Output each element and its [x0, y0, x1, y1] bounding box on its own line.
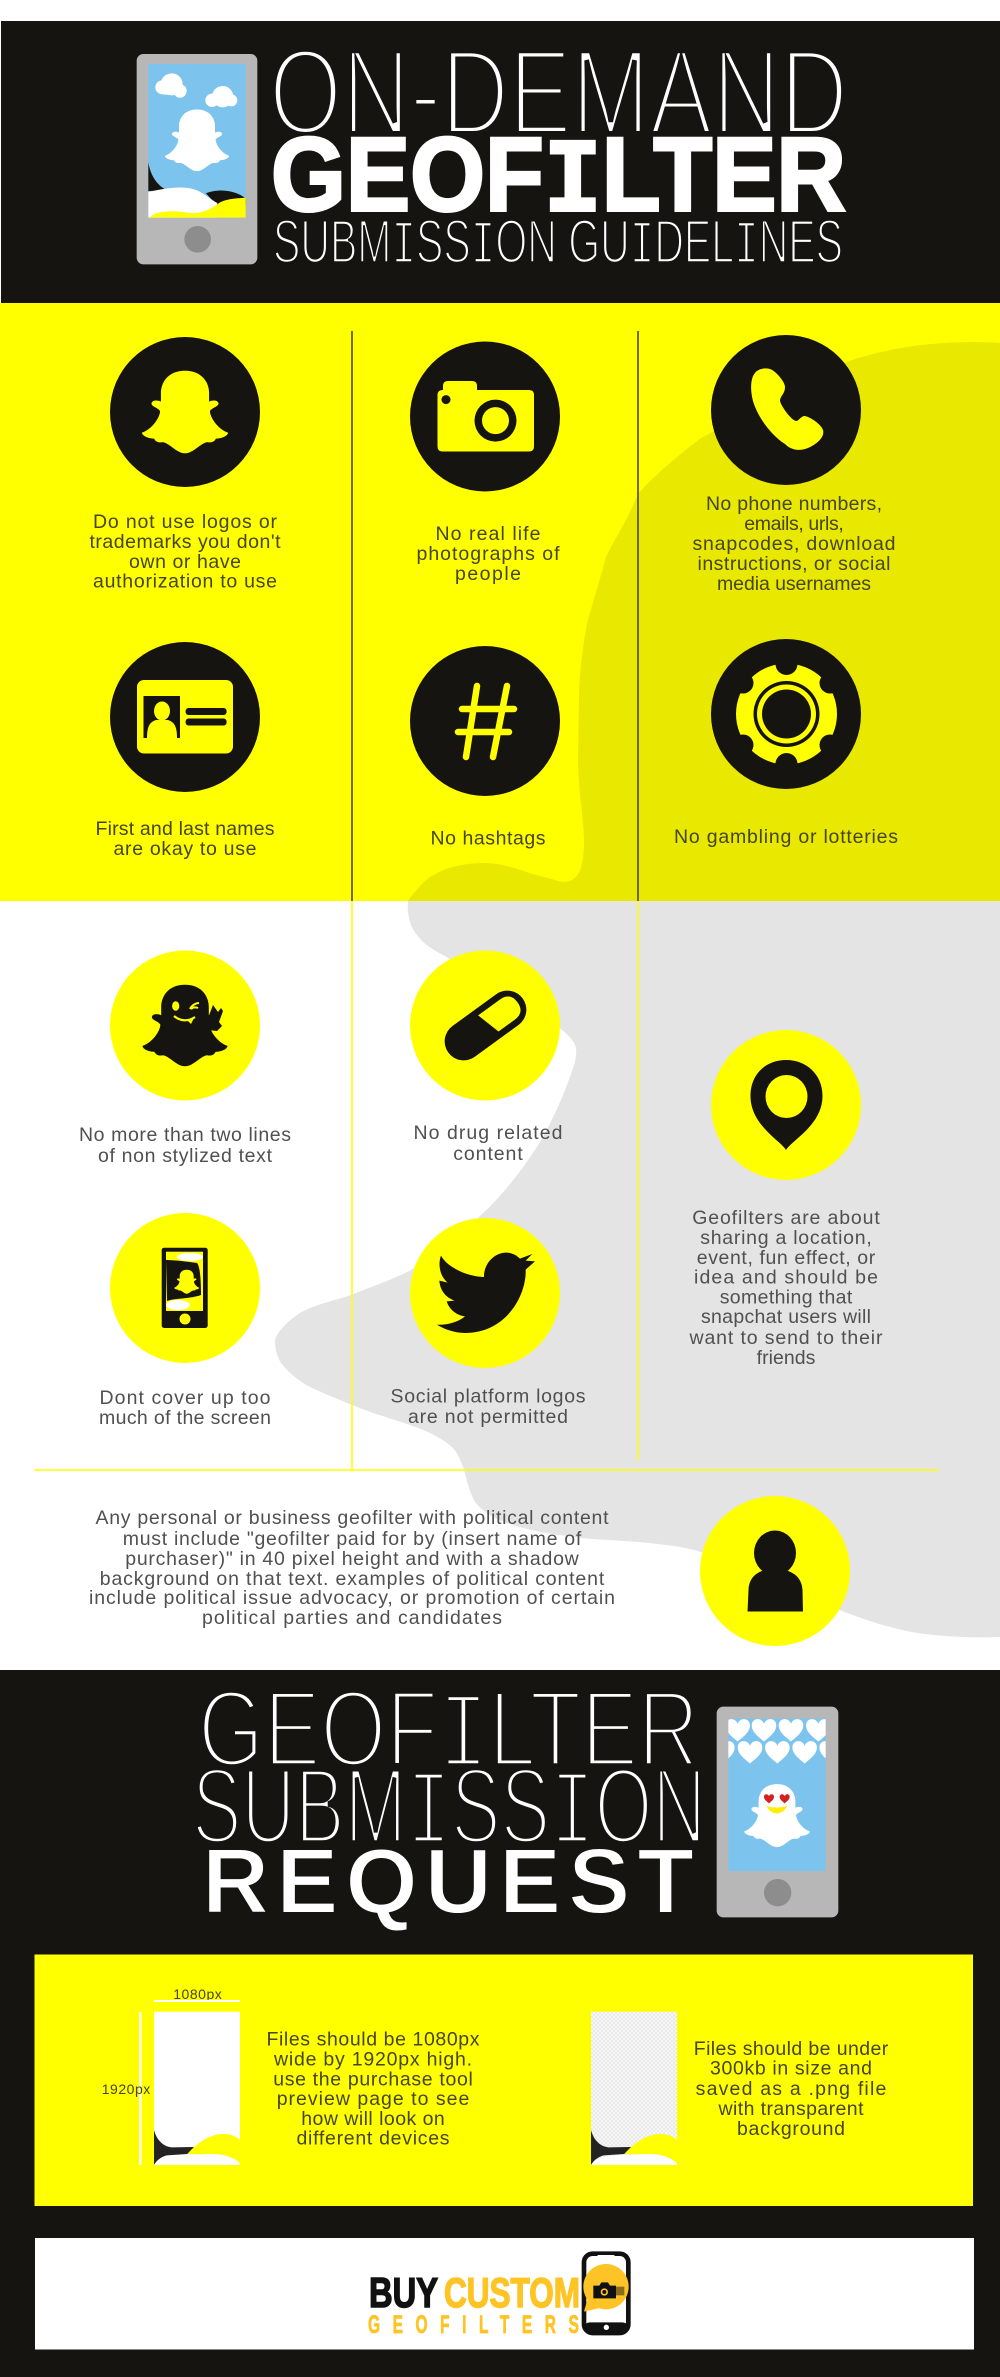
item: political content: background on that text. examples of political content — [100, 1568, 605, 1590]
text: file dimensions: different devices — [296, 2128, 450, 2150]
item: no more than two lines of text: No more than two lines — [79, 1124, 291, 1146]
text: file dimensions: use the purchase tool — [273, 2069, 473, 2091]
header band — [1, 21, 1000, 303]
item: first and last names okay: First and last names — [96, 818, 275, 840]
item: social platform logos: Social platform logos — [390, 1386, 586, 1408]
item: no more than two lines of text — [79, 950, 291, 1167]
item: no more than two lines of text: of non stylized text — [98, 1145, 273, 1167]
background blob — [275, 342, 1000, 1638]
item: no phone numbers: instructions, or social — [698, 553, 890, 575]
item: dont cover up the screen: Dont cover up too — [100, 1387, 271, 1409]
item: no drug related content — [410, 950, 562, 1165]
title: geofilter submission request: SUBMISSION — [192, 1746, 706, 1876]
logo: buy custom geofilters: GEOFILTERS — [368, 2311, 579, 2339]
icon: phone with heart-eye ghost — [710, 1707, 844, 1917]
item: dont cover up the screen: much of the screen — [99, 1407, 271, 1429]
item: no logos or trademarks: Do not use logos or — [93, 511, 278, 533]
item: dont cover up the screen — [99, 1213, 271, 1429]
item: no real life photographs: No real life — [436, 523, 540, 545]
panel: file requirements — [34, 1954, 973, 2206]
panel: logo strip — [35, 2238, 974, 2350]
logo: buy custom geofilters: CUSTOM — [444, 2269, 580, 2316]
text: file dimensions: how will look on — [301, 2108, 445, 2130]
item: no gambling or lotteries: No gambling or lotteries — [674, 826, 898, 848]
item: social platform logos: are not permitted — [408, 1406, 568, 1428]
item: no phone numbers: No phone numbers, — [706, 493, 882, 515]
text: file dimensions: preview page to see — [277, 2088, 469, 2110]
text: file dimensions — [266, 2028, 480, 2150]
item: no phone numbers — [692, 335, 896, 595]
item: first and last names okay — [96, 642, 275, 860]
item: no logos or trademarks: own or have — [129, 551, 241, 573]
text: file size and format: background — [737, 2118, 845, 2140]
text: file size and format: saved as a .png file — [696, 2078, 886, 2100]
text: file size and format: with transparent — [718, 2098, 864, 2120]
text: file size and format — [694, 2038, 889, 2140]
item: geofilters are about sharing: idea and should be — [694, 1267, 878, 1289]
item: no drug related content: No drug related — [414, 1122, 562, 1144]
lower black section — [0, 1670, 1000, 2377]
item: political content: purchaser)" in 40 pixel height and with a shadow — [125, 1548, 580, 1570]
title: on-demand geofilter submission guidelines: SUBMISSION GUIDELINES — [273, 208, 843, 282]
dimension: 1920px height: 1920px — [102, 2081, 150, 2097]
item: political content: must include "geofilter paid for by (insert name of — [123, 1528, 582, 1550]
title: geofilter submission request: GEOFILTER — [198, 1668, 699, 1799]
item: no phone numbers: emails, urls, — [744, 513, 844, 535]
item: no phone numbers: media usernames — [717, 573, 871, 595]
item: geofilters are about sharing: Geofilters are about — [692, 1207, 880, 1229]
item: geofilters are about sharing — [688, 1030, 883, 1369]
icon: phone with snapchat ghost and clouds — [137, 54, 257, 264]
item: geofilters are about sharing: friends — [757, 1347, 816, 1369]
item: political content: include political issue advocacy, or promotion of certain — [89, 1587, 615, 1609]
title: on-demand geofilter submission guidelines: ON-DEMAND — [269, 24, 848, 160]
dimension: 1080px width: 1080px — [173, 1986, 222, 2002]
title: geofilter submission request: REQUEST — [202, 1829, 694, 1933]
text: file dimensions: wide by 1920px high. — [273, 2049, 472, 2071]
item: no real life photographs: photographs of — [416, 543, 560, 565]
item: first and last names okay: are okay to use — [114, 838, 256, 860]
item: geofilters are about sharing: something that — [720, 1286, 853, 1308]
panel: white guidelines background — [0, 901, 1000, 1670]
item: no phone numbers: snapcodes, download — [692, 533, 896, 555]
title: geofilter submission request — [192, 1668, 706, 1933]
text: file dimensions: Files should be 1080px — [266, 2028, 480, 2050]
title: on-demand geofilter submission guidelines — [269, 24, 848, 282]
template: geofilter transparent — [591, 2012, 677, 2165]
panel: yellow guidelines background — [0, 303, 1000, 901]
template: geofilter white — [154, 2012, 240, 2165]
item: geofilters are about sharing: snapchat users will — [701, 1306, 871, 1328]
title: on-demand geofilter submission guidelines: GEOFILTER — [271, 116, 846, 242]
item: political content: Any personal or business geofilter with political content — [96, 1507, 609, 1529]
item: no drug related content: content — [453, 1143, 523, 1165]
item: political content: political parties and candidates — [202, 1607, 502, 1629]
item: no hashtags: No hashtags — [430, 828, 546, 850]
text: file size and format: 300kb in size and — [710, 2058, 872, 2080]
logo: buy custom geofilters: BUY — [369, 2269, 438, 2316]
text: file size and format: Files should be under — [694, 2038, 889, 2060]
item: no logos or trademarks: authorization to use — [93, 570, 277, 592]
item: political content — [89, 1496, 850, 1646]
item: no logos or trademarks: trademarks you don't — [90, 531, 281, 553]
item: no real life photographs — [410, 342, 560, 585]
logo: buy custom geofilters — [368, 2254, 629, 2339]
item: geofilters are about sharing: want to send to their — [688, 1327, 883, 1349]
item: no hashtags — [410, 646, 560, 850]
item: no gambling or lotteries — [674, 639, 898, 848]
item: no logos or trademarks — [90, 337, 281, 592]
dimension: 1080px width — [154, 1986, 240, 2002]
item: geofilters are about sharing: sharing a location, — [700, 1227, 872, 1249]
item: social platform logos — [390, 1218, 586, 1428]
item: no real life photographs: people — [455, 563, 521, 585]
item: geofilters are about sharing: event, fun effect, or — [697, 1247, 876, 1269]
